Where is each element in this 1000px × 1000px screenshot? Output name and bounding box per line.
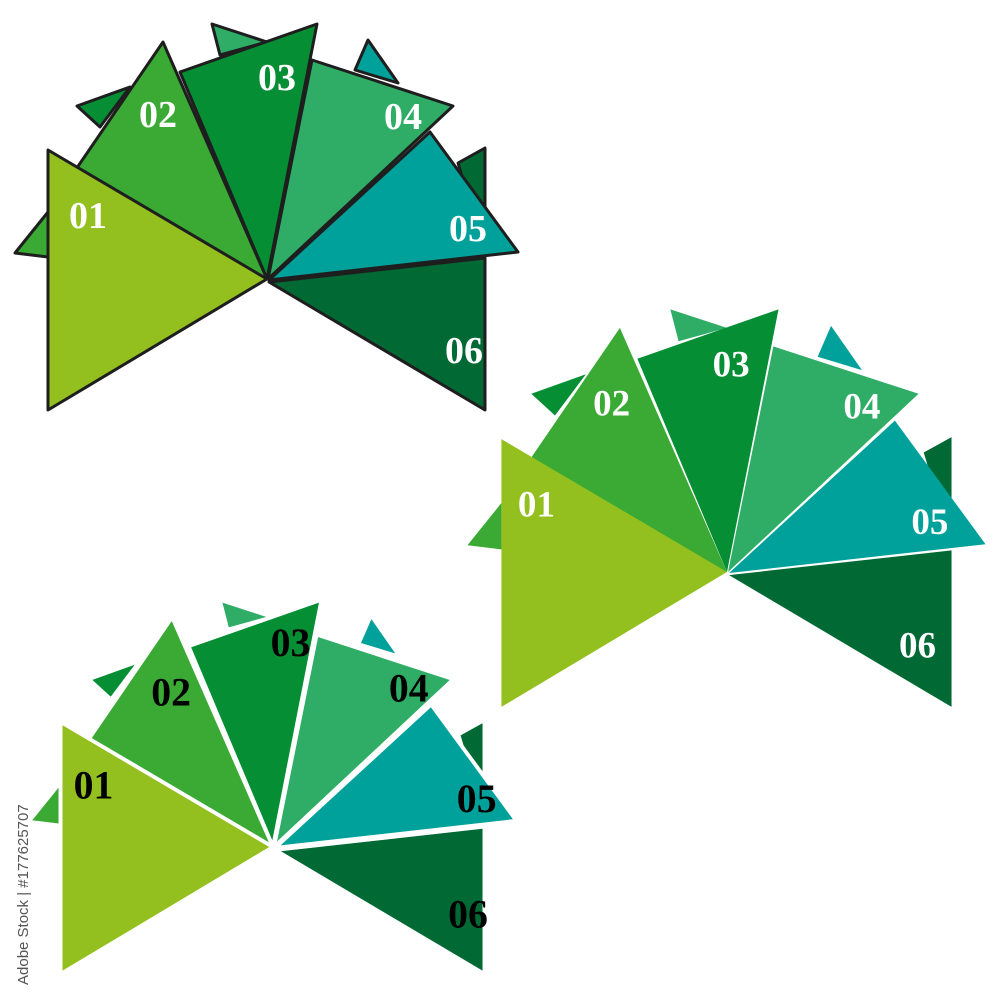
numbers top fan: 02 bbox=[139, 94, 177, 136]
numbers middle fan: 02 bbox=[593, 383, 630, 424]
numbers top fan: 05 bbox=[449, 208, 487, 250]
numbers bottom fan bbox=[74, 621, 497, 937]
numbers bottom fan: 01 bbox=[74, 764, 113, 807]
numbers bottom fan: 03 bbox=[271, 621, 310, 665]
numbers top fan: 04 bbox=[384, 96, 422, 138]
numbers top fan: 01 bbox=[69, 195, 107, 237]
numbers top fan: 03 bbox=[258, 57, 296, 99]
numbers middle fan: 01 bbox=[518, 484, 555, 525]
numbers bottom fan: 05 bbox=[457, 777, 497, 821]
numbers middle fan: 03 bbox=[713, 344, 750, 385]
numbers middle fan: 04 bbox=[843, 387, 880, 428]
numbers middle fan: 05 bbox=[911, 502, 948, 543]
fan: bottom-left white gaps bbox=[29, 600, 516, 974]
numbers bottom fan: 04 bbox=[389, 666, 429, 710]
numbers bottom fan: 02 bbox=[151, 670, 191, 714]
numbers top fan: 06 bbox=[445, 330, 483, 372]
fan: top-left outlined bbox=[15, 24, 518, 410]
numbers middle fan bbox=[518, 344, 948, 666]
fan: middle-right bbox=[467, 309, 986, 707]
numbers bottom fan: 06 bbox=[448, 893, 488, 937]
numbers top fan bbox=[69, 57, 487, 372]
watermark credit: Adobe Stock | #177625707 bbox=[15, 804, 32, 985]
numbers middle fan: 06 bbox=[899, 625, 936, 666]
